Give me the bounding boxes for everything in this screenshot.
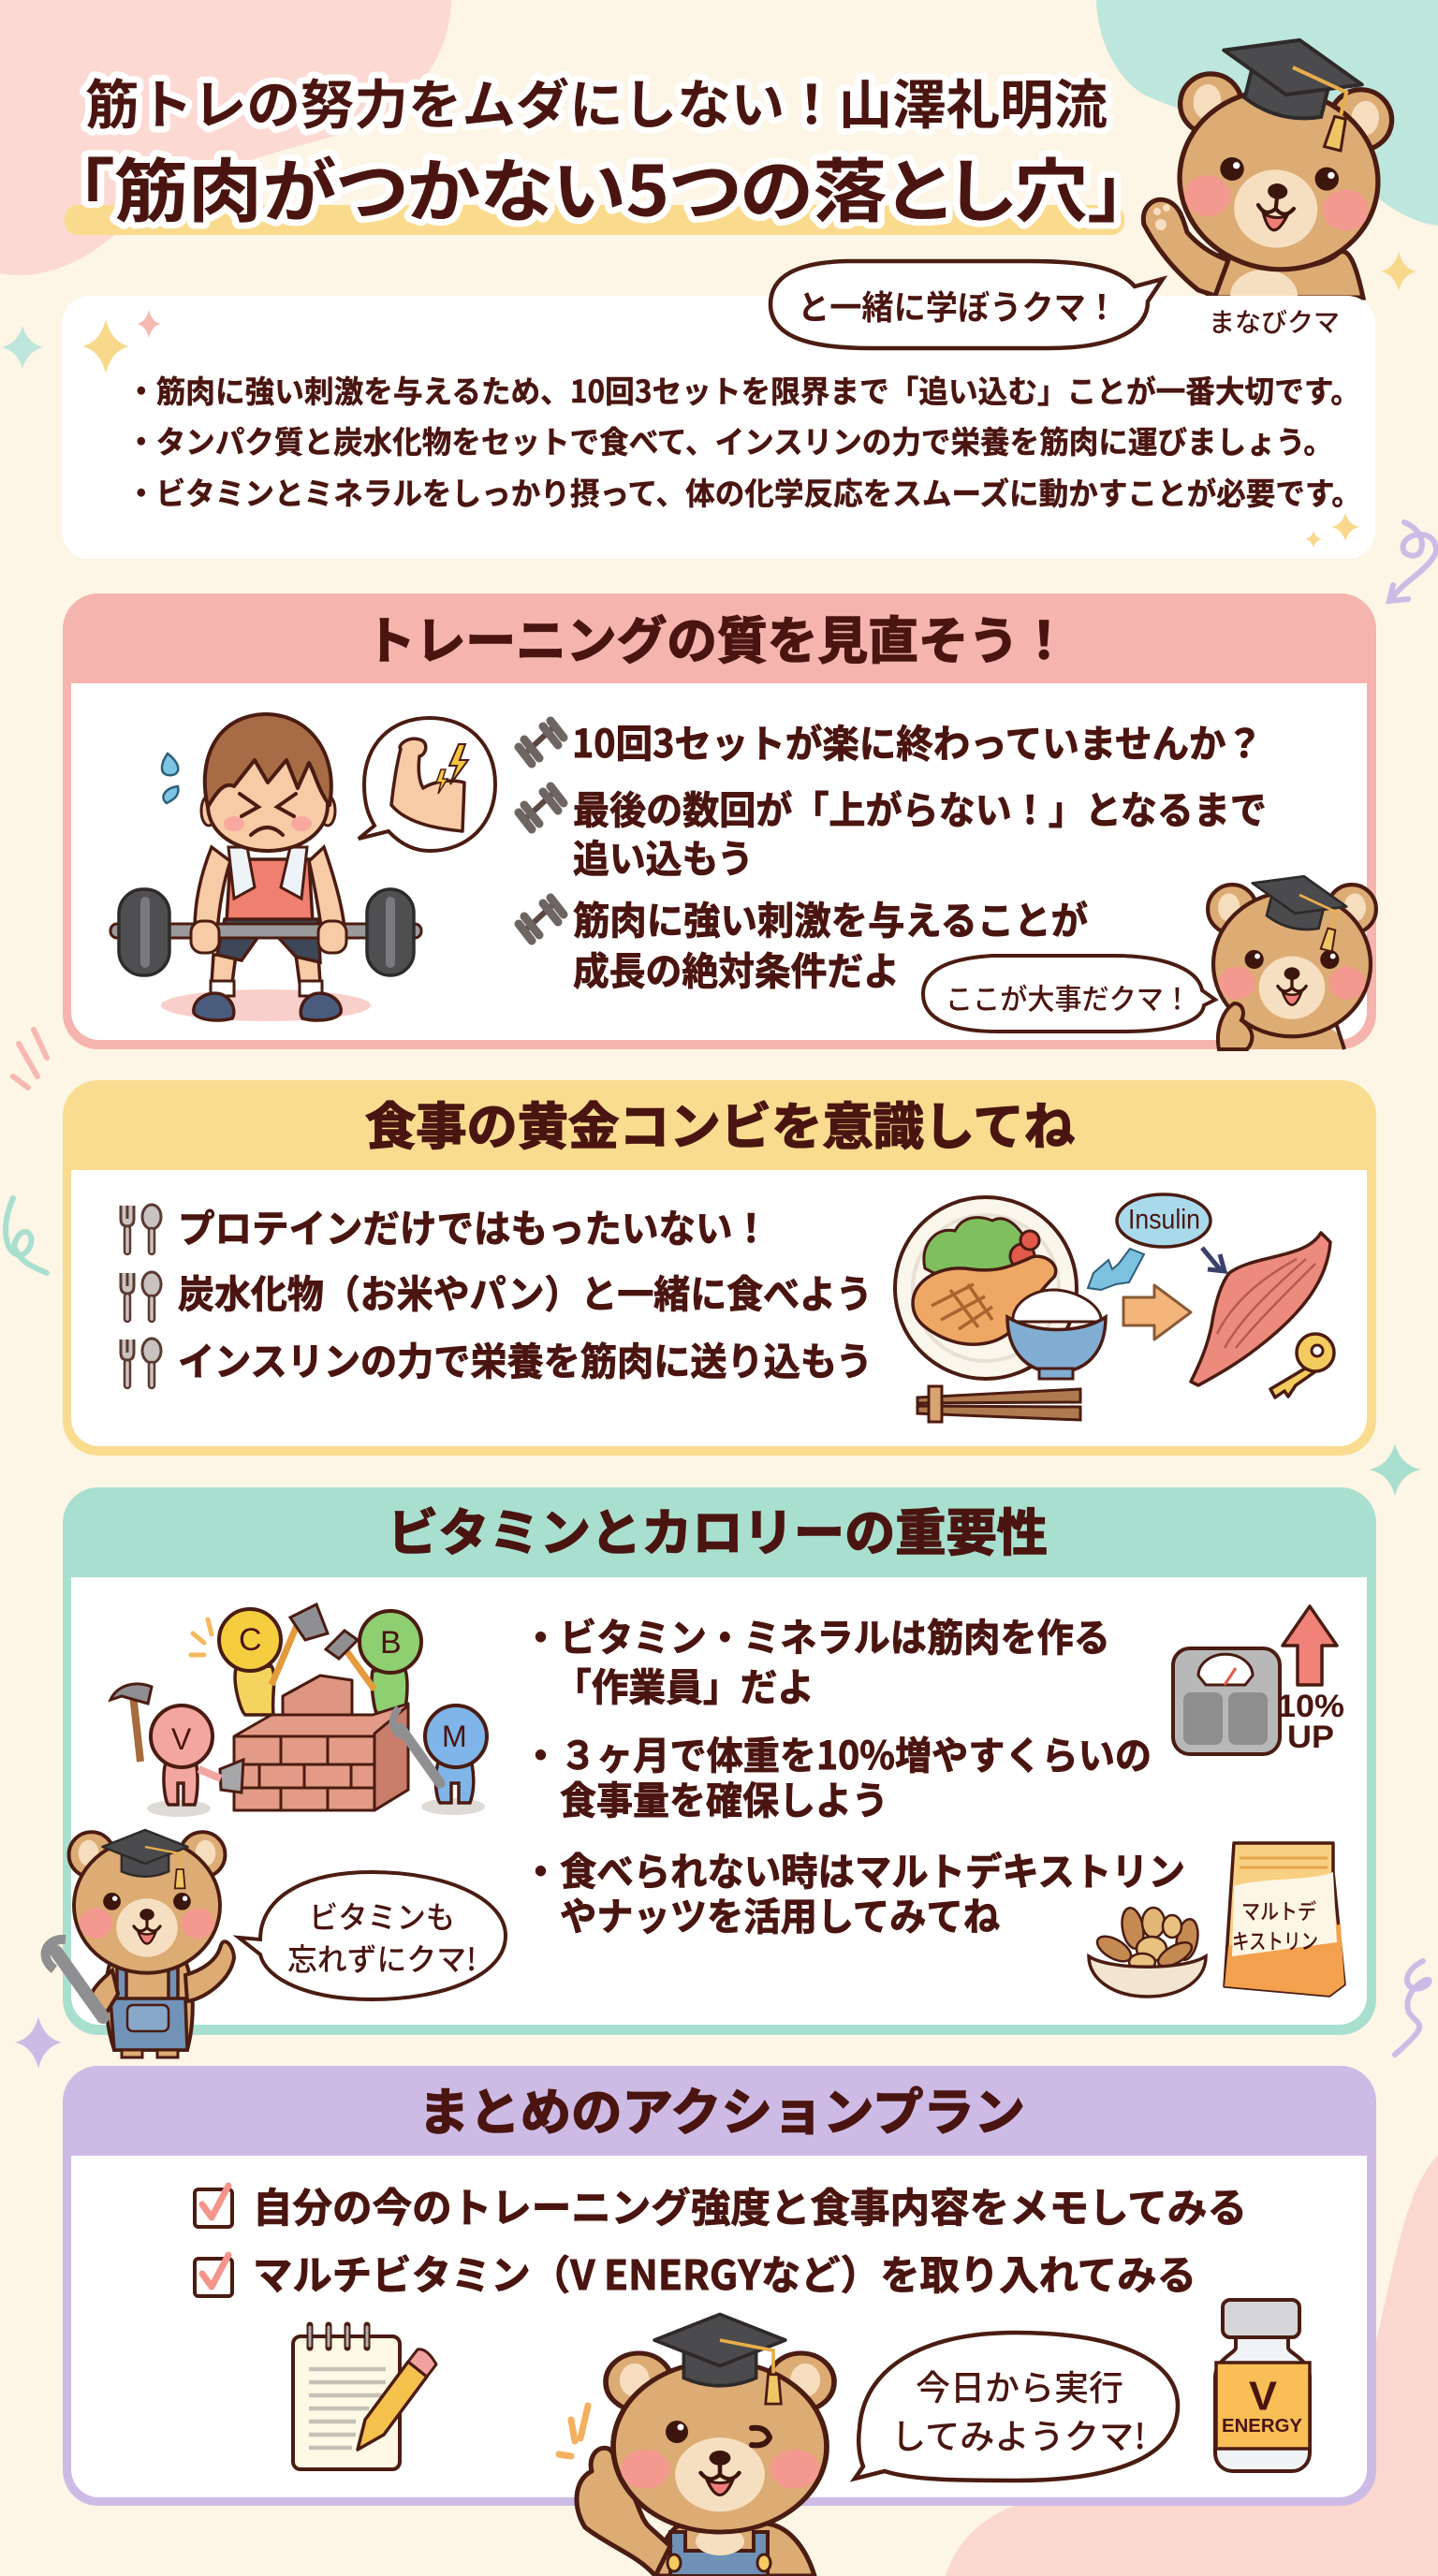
illustration: V ENERGY bottle: ENERGY — [1222, 2416, 1303, 2437]
vitamin item 1 continued: 「作業員」だよ — [554, 1656, 814, 1712]
speech bubble: training: ここが大事だクマ！ — [946, 975, 1191, 1018]
speech bubble: action plan: 今日から実行 — [916, 2360, 1123, 2410]
list item 3: 筋肉に強い刺激を与えることが — [573, 889, 1088, 945]
action item 1: 自分の今のトレーニング強度と食事内容をメモしてみる — [253, 2176, 1247, 2234]
vitamin item 2: ３ヶ月で体重を10%増やすくらいの — [560, 1724, 1152, 1780]
illustration: scale — [1173, 1648, 1280, 1754]
arrow: food to muscle — [1123, 1285, 1191, 1339]
vitamin item 1: ビタミン・ミネラルは筋肉を作る — [560, 1606, 1110, 1662]
icon: fork and spoon 3 — [121, 1339, 161, 1388]
illustration: plate of chicken and rice — [895, 1197, 1106, 1379]
title line 2: 「筋肉がつかない5つの落とし穴」 — [77, 137, 1125, 236]
illustration: hand reaching insulin — [1088, 1249, 1144, 1290]
illustration: chopsticks — [917, 1386, 1080, 1422]
list item 1: 10回3セットが楽に終わっていませんか？ — [572, 712, 1263, 768]
title — [65, 63, 1125, 236]
icon: dumbbell 2 — [519, 786, 564, 829]
vitamin M worker: M — [442, 1720, 467, 1753]
panel: vitamins — [63, 1487, 1376, 2035]
vitamin C worker — [191, 1604, 328, 1715]
speech bubble: top — [770, 261, 1163, 348]
illustration: insulin bubble — [1117, 1194, 1211, 1247]
speech bubble: top: と一緒に学ぼうクマ！ — [798, 281, 1118, 329]
mascot: bear with wrench — [46, 1830, 234, 2057]
thought bubble: flexed arm — [359, 718, 495, 851]
heading: vitamins: ビタミンとカロリーの重要性 — [388, 1492, 1048, 1565]
speech bubble: action plan — [855, 2333, 1178, 2481]
decorative blob: teal top right — [1096, 0, 1438, 226]
mascot: bear pointing — [1208, 865, 1376, 1049]
bricks — [234, 1676, 408, 1810]
vitamin V worker: V — [171, 1722, 192, 1756]
vitamin B worker: B — [380, 1625, 402, 1661]
decorative sparkles — [1, 252, 1420, 2069]
panel: training — [63, 593, 1376, 1049]
meal item 1: プロテインだけではもったいない！ — [178, 1197, 770, 1253]
vitamin B worker — [326, 1611, 421, 1713]
panel: meals — [63, 1080, 1376, 1456]
vitamin V worker — [110, 1684, 243, 1805]
heading: action plan: まとめのアクションプラン — [418, 2071, 1025, 2145]
intro bullet 2: ・タンパク質と炭水化物をセットで食べて、インスリンの力で栄養を筋肉に運びましょう。 — [126, 417, 1333, 462]
speech bubble: vitamins: ビタミンも — [309, 1893, 455, 1938]
panel: action plan — [63, 2066, 1376, 2506]
label: 10% up — [1277, 1689, 1344, 1755]
illustration: V ENERGY bottle — [1215, 2300, 1310, 2471]
illustration: nuts bowl — [1089, 1906, 1206, 1997]
label: 10% up: UP — [1287, 1720, 1334, 1755]
vitamin item 2 bullet: ・ — [521, 1724, 560, 1780]
arrow: insulin to muscle — [1202, 1248, 1225, 1271]
training list — [519, 712, 1267, 996]
speech bubble: vitamins: 忘れずにクマ! — [287, 1935, 477, 1980]
illustration: muscle — [1191, 1233, 1330, 1385]
meal item 3: インスリンの力で栄養を筋肉に送り込もう — [178, 1330, 873, 1386]
illustration: maltodextrin bag — [1225, 1843, 1344, 1996]
panel: intro — [62, 296, 1375, 559]
mascot body: top bear — [1143, 23, 1395, 322]
illustration: notepad and pencil — [293, 2325, 436, 2469]
list item 2 continued: 追い込もう — [573, 827, 754, 884]
vitamin item 3 bullet: ・ — [521, 1840, 560, 1896]
decorative blob: pink top left — [0, 0, 451, 275]
vitamin item 3 continued: やナッツを活用してみてね — [560, 1885, 1000, 1941]
heading: meals: 食事の黄金コンビを意識してね — [365, 1086, 1075, 1159]
intro bullet 1: ・筋肉に強い刺激を与えるため、10回3セットを限界まで「追い込む」ことが一番大切です。 — [126, 367, 1360, 412]
intro sparkles — [82, 310, 1359, 548]
illustration: maltodextrin bag: キストリン — [1232, 1924, 1318, 1955]
title highlight bar — [65, 205, 1124, 235]
speech bubble: training — [923, 956, 1215, 1032]
arrow: weight up — [1283, 1606, 1337, 1685]
title line 1: 筋トレの努力をムダにしない！山澤礼明流 — [85, 63, 1108, 139]
speech bubble: vitamins — [239, 1872, 506, 1999]
vitamins list — [521, 1606, 1185, 1941]
illustration: insulin bubble: Insulin — [1128, 1204, 1200, 1236]
vitamin item 3: 食べられない時はマルトデキストリン — [560, 1840, 1185, 1896]
label: 10% up: 10% — [1277, 1689, 1344, 1724]
mascot name: まなびクマ — [1209, 302, 1340, 340]
illustration: maltodextrin bag: マルトデ — [1241, 1894, 1316, 1925]
illustration: weightlifter — [110, 714, 421, 1021]
illustration: vitamin workers and bricks — [110, 1604, 487, 1817]
vitamin item 2 continued: 食事量を確保しよう — [560, 1769, 888, 1825]
meals list — [121, 1197, 873, 1388]
list item 3 continued: 成長の絶対条件だよ — [573, 940, 900, 996]
list item 2: 最後の数回が「上がらない！」となるまで — [573, 779, 1267, 835]
icon: dumbbell 3 — [519, 898, 564, 941]
meal item 2: 炭水化物（お米やパン）と一緒に食べよう — [178, 1263, 873, 1319]
illustration: V ENERGY bottle: V — [1249, 2374, 1278, 2419]
intro bullet 3: ・ビタミンとミネラルをしっかり摂って、体の化学反応をスムーズに動かすことが必要です。 — [126, 469, 1361, 514]
icon: dumbbell 1 — [519, 721, 564, 764]
heading: training: トレーニングの質を見直そう！ — [365, 599, 1069, 674]
vitamin C worker: C — [239, 1622, 262, 1658]
decorative squiggles — [6, 522, 1436, 2055]
icon: fork and spoon 1 — [121, 1205, 161, 1254]
vitamin item 1 bullet: ・ — [521, 1606, 560, 1662]
icon: fork and spoon 2 — [121, 1272, 161, 1322]
mascot: bear thumbs up — [559, 2314, 834, 2576]
speech bubble: action plan: してみようクマ! — [891, 2408, 1146, 2459]
action item 2: マルチビタミン（V ENERGYなど）を取り入れてみる — [253, 2244, 1196, 2302]
decorative blob: pink bottom right — [946, 2155, 1438, 2576]
vitamin M worker — [393, 1705, 487, 1803]
illustration: key — [1270, 1334, 1334, 1398]
